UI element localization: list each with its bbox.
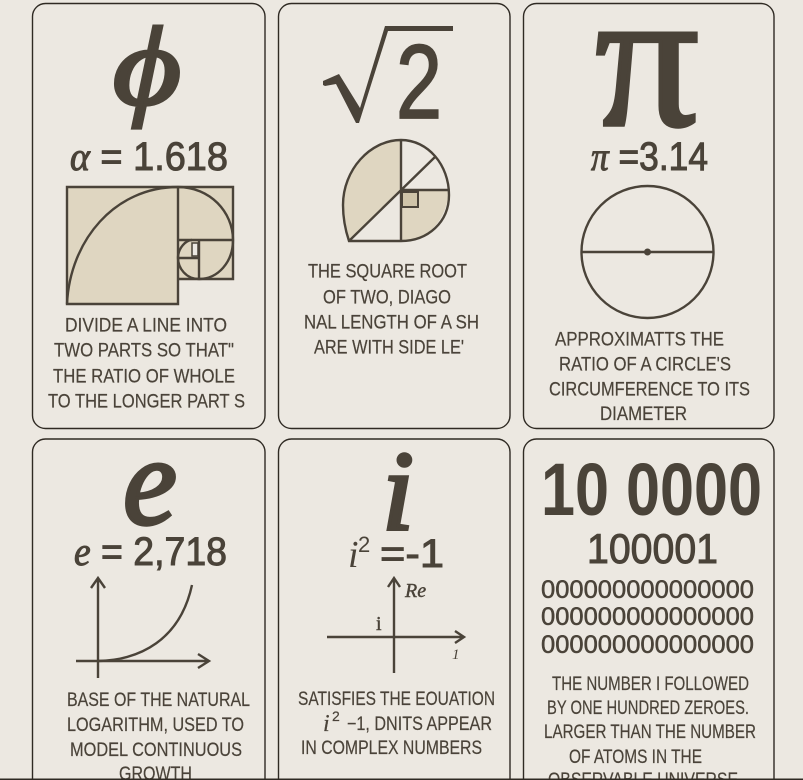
i description: i	[323, 711, 330, 737]
golden ratio description: DIVIDE A LINE INTO	[65, 314, 227, 336]
e symbol: e	[123, 413, 177, 552]
pi description: RATIO OF A CIRCLE'S	[559, 354, 731, 376]
panel: golden ratio	[32, 4, 265, 428]
e description: LOGARITHM, USED TO	[67, 714, 244, 736]
golden ratio description: TWO PARTS SO THAT"	[54, 340, 234, 362]
i value: 2	[358, 532, 370, 557]
panel: imaginary unit	[278, 429, 510, 779]
i description: −1, DNITS APPEAR	[347, 713, 492, 735]
i description: 2	[332, 708, 340, 724]
golden ratio value: α = 1.618	[70, 134, 228, 179]
e value: e = 2,718	[74, 529, 227, 574]
secondary number: 100001	[587, 525, 718, 572]
pi description: DIAMETER	[600, 403, 687, 425]
panel: euler number	[32, 413, 265, 780]
root two description: THE SQUARE ROOT	[308, 260, 467, 282]
pi value: π =3.14	[591, 134, 708, 179]
i value: i	[348, 534, 359, 576]
e description	[67, 689, 250, 780]
googol description	[544, 673, 756, 780]
root two diagram	[343, 140, 449, 241]
pi description	[549, 328, 750, 425]
root two description: OF TWO, DIAGO	[323, 286, 451, 308]
complex plane chart: 1	[452, 647, 460, 663]
e description: MODEL CONTINUOUS	[70, 739, 242, 761]
complex plane chart: Re	[404, 580, 426, 602]
pi description: CIRCUMFERENCE TO ITS	[549, 378, 750, 400]
pi description: APPROXIMATTS THE	[555, 328, 724, 350]
root two description	[304, 260, 479, 358]
complex plane chart: i	[376, 613, 382, 635]
root two symbol	[323, 24, 453, 141]
i description: SATISFIES THE EOUATION	[298, 688, 495, 710]
panel: googol	[524, 439, 774, 780]
rows of zeros: 000000000000000	[541, 576, 754, 604]
golden spiral diagram	[67, 187, 233, 304]
googol description: THE NUMBER I FOLLOWED	[552, 673, 749, 695]
i symbol: i	[382, 429, 414, 554]
exponential curve chart	[76, 578, 209, 678]
googol description: OF ATOMS IN THE	[569, 746, 702, 768]
i value: =-1	[380, 532, 444, 576]
golden ratio description: TO THE LONGER PART S	[48, 390, 245, 412]
i description: IN COMPLEX NUMBERS	[301, 737, 482, 759]
e description: BASE OF THE NATURAL	[67, 689, 250, 711]
circle diameter diagram	[581, 186, 714, 318]
panel: pi	[524, 0, 774, 428]
i value	[348, 532, 444, 576]
golden ratio description	[48, 314, 245, 412]
phi symbol: ϕ	[113, 5, 181, 129]
rows of zeros	[541, 576, 754, 659]
panel: square root of two	[278, 4, 510, 428]
complex plane chart	[327, 578, 464, 673]
large number heading: 10 0000	[541, 448, 762, 531]
root two description: NAL LENGTH OF A SH	[304, 312, 479, 334]
rows of zeros: 000000000000000	[541, 631, 754, 659]
root two description: ARE WITH SIDE LE'	[314, 336, 464, 358]
i description	[298, 688, 495, 759]
rows of zeros: 000000000000000	[541, 603, 754, 631]
golden ratio description: THE RATIO OF WHOLE	[53, 366, 235, 388]
root two symbol: 2	[396, 24, 442, 141]
